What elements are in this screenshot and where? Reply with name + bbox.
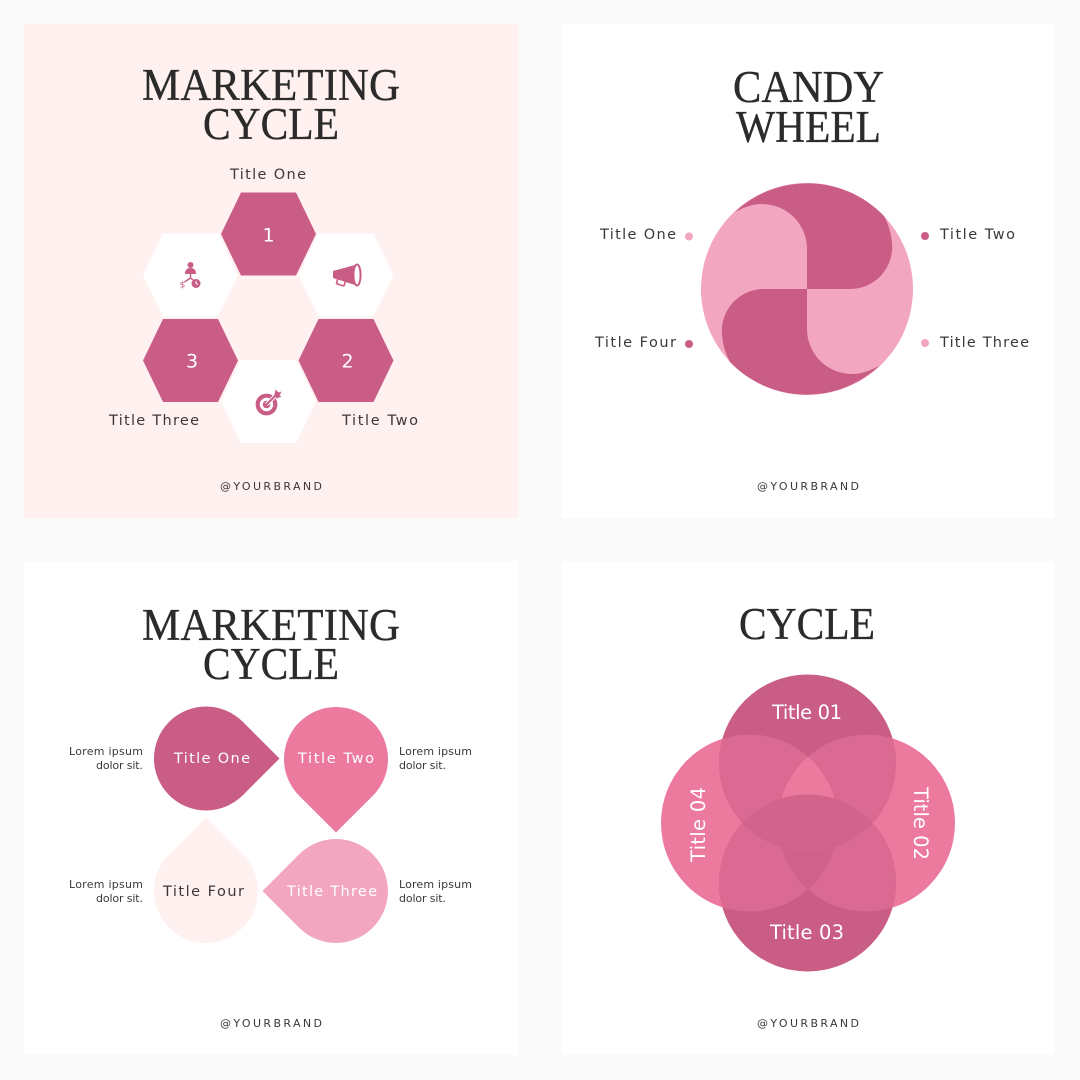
label: title 02: Title 02 [909,786,932,860]
label: title two with dot: Title Two [939,227,1015,243]
text: lorem bottom right: Lorem ipsum [399,878,472,891]
label: title four with dot: Title Four [594,335,676,351]
text: lorem bottom left [69,878,143,905]
heading: marketing cycle: MARKETING [142,600,400,650]
text: lorem top left: Lorem ipsum [69,745,143,758]
teardrop: title four: Title Four [162,884,244,900]
text: lorem bottom right [399,878,472,905]
teardrop: title three [262,839,388,943]
label: title one: Title One [229,167,306,183]
hexagon: megaphone icon [298,234,394,316]
label: title two: Title Two [341,413,418,429]
brand handle: @YOURBRAND [220,480,322,493]
text: lorem top left [69,745,143,772]
hexagon 3 [143,319,238,402]
brand handle: @YOURBRAND [757,1017,859,1030]
hexagon 2 [298,319,394,402]
label: title three: Title Three [108,413,199,429]
heading: candy wheel [733,62,884,152]
label: title 01: Title 01 [771,701,842,724]
teardrop: title three: Title Three [286,884,377,900]
teardrop: title two: Title Two [297,751,374,767]
brand handle: @YOURBRAND [757,480,859,493]
heading: marketing cycle [142,60,400,149]
text: lorem top right: Lorem ipsum [399,745,472,758]
text: lorem bottom right: dolor sit. [399,892,446,905]
teardrop: title four [154,818,258,943]
chart: four circle venn [661,674,955,972]
heading: marketing cycle: CYCLE [203,639,339,689]
hexagon 1: 1 [262,224,275,246]
heading: candy wheel: WHEEL [736,102,881,152]
teardrop: title one [154,707,280,810]
heading: marketing cycle: CYCLE [203,99,339,149]
hexagon: person money time icon: $ [180,280,185,290]
panel: candy wheel [561,24,1055,518]
brand handle: @YOURBRAND [220,1017,322,1030]
hexagon 2: 2 [341,350,354,372]
teardrop: title one: Title One [173,751,250,767]
heading: marketing cycle [142,600,400,689]
text: lorem top left: dolor sit. [96,759,143,772]
text: lorem bottom left: Lorem ipsum [69,878,143,891]
teardrop: title two [284,707,388,832]
hexagon 1 [221,192,316,276]
text: lorem top right [399,745,472,772]
panel: cycle venn [661,608,955,1029]
heading: marketing cycle: MARKETING [142,60,400,110]
hexagon 3: 3 [186,350,198,372]
label: title 04: Title 04 [687,787,710,863]
text: lorem top right: dolor sit. [399,759,446,772]
heading: candy wheel: CANDY [733,62,884,112]
hexagon: person money time icon [143,234,238,316]
hexagon: target icon [221,360,316,443]
panel: marketing cycle hexagons [24,24,518,518]
chart: candy wheel [701,183,913,395]
label: title 03: Title 03 [769,921,844,944]
label: title one with dot: Title One [599,227,676,243]
label: title three with dot: Title Three [939,335,1029,351]
heading: cycle: CYCLE [739,599,875,649]
text: lorem bottom left: dolor sit. [96,892,143,905]
panel: marketing cycle teardrops [24,561,518,1055]
